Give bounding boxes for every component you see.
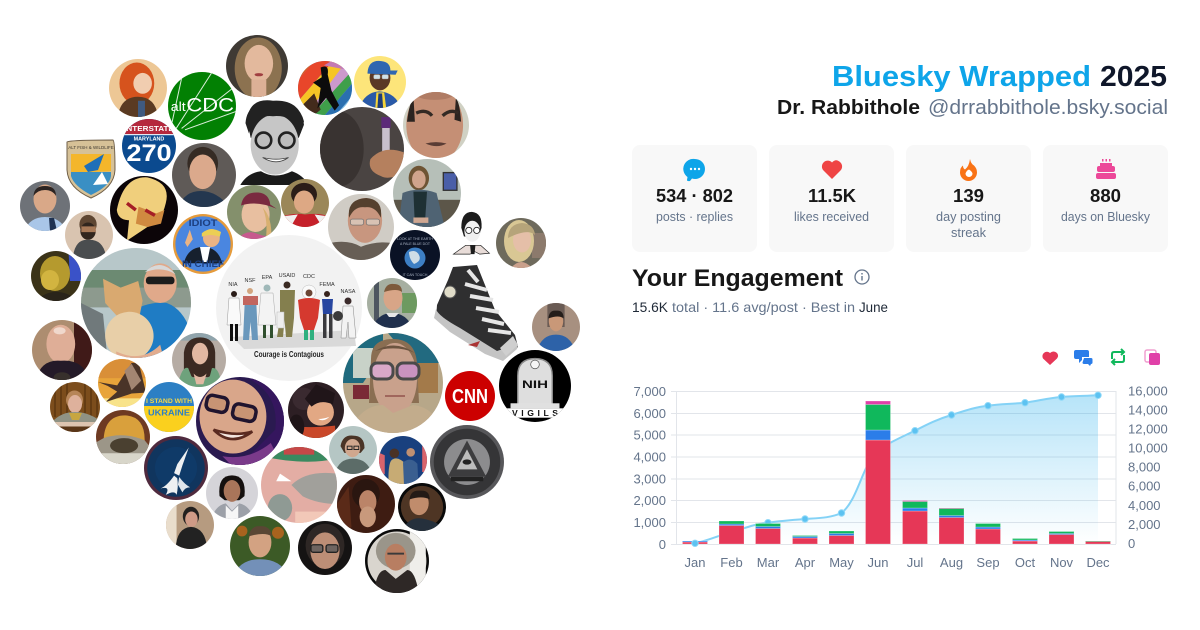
month labels: Aug bbox=[940, 555, 963, 570]
avatar: rainbow flag silhouette bbox=[298, 61, 352, 115]
avatar: bald older man bbox=[32, 320, 92, 383]
panel: days on Bluesky bbox=[1043, 145, 1168, 252]
left axis labels: 0 bbox=[659, 537, 666, 552]
figures in uniform bbox=[227, 282, 356, 341]
month labels: Jan bbox=[685, 555, 705, 570]
agency labels bbox=[228, 273, 356, 295]
avatar: Maryland interstate 270 sign: 270 bbox=[126, 140, 172, 167]
month labels: May bbox=[829, 555, 854, 570]
right axis labels: 4,000 bbox=[1128, 498, 1161, 513]
avatar: fish and wildlife shield: ALT FISH & WILDLIFE bbox=[68, 145, 114, 150]
icon: replies bubbles bbox=[1074, 350, 1092, 366]
icon: likes heart bbox=[1042, 352, 1058, 365]
avatar: man with curly hair and hand at mouth bbox=[337, 475, 395, 533]
right axis labels: 14,000 bbox=[1128, 402, 1168, 418]
avatar: woman with gray curly hair, black ring bbox=[365, 529, 429, 593]
chart legend bbox=[1042, 349, 1160, 366]
avatar: Maryland interstate 270 sign: MARYLAND bbox=[134, 137, 164, 143]
avatar: altCDC logo bbox=[168, 72, 236, 140]
avatar: CNN logo: CNN bbox=[452, 386, 488, 408]
left axis labels: 4,000 bbox=[633, 450, 666, 464]
avatar: I Stand With Ukraine badge: UKRAINE bbox=[148, 408, 190, 418]
cumulative area and line bbox=[695, 392, 1101, 544]
title: 2025 bbox=[1100, 61, 1167, 93]
avatar: altCDC logo: alt bbox=[171, 99, 186, 114]
agency labels: NSF bbox=[244, 278, 256, 284]
engagement summary: total · 11.6 avg/post · Best in bbox=[672, 299, 855, 315]
avatar: bearded man with glasses bbox=[65, 211, 113, 259]
avatar: woman with long hair bbox=[226, 35, 288, 99]
avatar: earth from space: IT CAN TOUCH bbox=[403, 273, 428, 277]
avatar: ink cartoon man with glasses bbox=[453, 212, 489, 254]
month labels bbox=[685, 555, 1110, 570]
avatar: man selfie with glasses bbox=[328, 194, 394, 260]
avatar: woman in Virginia Tech cap bbox=[227, 185, 281, 239]
icon: chat bubble bbox=[683, 159, 705, 181]
agency labels: NASA bbox=[341, 289, 356, 295]
agency labels: USAID bbox=[279, 273, 295, 279]
left axis labels: 2,000 bbox=[633, 493, 666, 508]
right axis labels: 8,000 bbox=[1128, 460, 1161, 474]
avatar: I Stand With Ukraine badge bbox=[144, 382, 194, 432]
agency labels: EPA bbox=[262, 275, 273, 281]
avatar: NIH Vigils gravestone: VIGILS bbox=[512, 408, 558, 418]
agency labels: CDC bbox=[303, 274, 315, 280]
avatar: Maryland interstate 270 sign: INTERSTATE bbox=[124, 124, 174, 133]
panel: days on Bluesky: days on Bluesky bbox=[1061, 209, 1150, 224]
avatar: judge at a wooden bench bbox=[50, 382, 100, 432]
right axis labels: 10,000 bbox=[1128, 440, 1168, 456]
month labels: Feb bbox=[720, 555, 743, 570]
month labels: Jul bbox=[907, 555, 923, 570]
avatar: illuminati pyramid coin bbox=[430, 425, 504, 499]
avatar: woman with glasses and short dark hair bbox=[329, 426, 377, 474]
panel: day posting streak: 139 bbox=[953, 186, 984, 206]
avatar: I Stand With Ukraine badge: I STAND WITH bbox=[146, 398, 192, 405]
avatar: black and white portrait bbox=[240, 100, 309, 185]
avatar: rocket mission patch bbox=[144, 436, 208, 500]
left axis labels bbox=[633, 384, 666, 552]
agency labels: FEMA bbox=[319, 282, 335, 288]
avatar: woman in gray blazer bbox=[393, 159, 461, 227]
panel: day posting streak: streak bbox=[951, 225, 986, 240]
avatar: man in blue shirt with dog bbox=[81, 248, 196, 360]
panel: posts and replies: posts · replies bbox=[656, 209, 733, 224]
panel: likes received: 11.5K bbox=[808, 186, 856, 206]
left axis labels: 6,000 bbox=[633, 406, 666, 421]
right axis labels bbox=[1128, 384, 1168, 551]
avatar cluster bbox=[20, 35, 580, 593]
left axis labels: 7,000 bbox=[633, 384, 666, 399]
left axis labels: 5,000 bbox=[633, 428, 666, 442]
avatar: man on gray background bbox=[172, 143, 236, 207]
icon: info bbox=[855, 270, 869, 284]
month labels: Jun bbox=[868, 555, 888, 570]
avatar: pterodactyl at sunset bbox=[98, 359, 146, 407]
gridlines bbox=[671, 391, 1116, 544]
avatar: man in dark sweater bbox=[367, 278, 417, 328]
avatar: woman with long brown hair and green top bbox=[172, 333, 226, 387]
header bbox=[777, 61, 1168, 119]
chart: monthly engagement bbox=[633, 384, 1168, 570]
avatar: idiot in chief badge bbox=[173, 214, 233, 274]
month labels: Nov bbox=[1050, 555, 1074, 570]
right axis labels: 12,000 bbox=[1128, 422, 1168, 436]
month labels: Oct bbox=[1015, 555, 1035, 570]
avatar: woman in black suit bbox=[166, 501, 214, 549]
avatar: blonde anime character bbox=[110, 176, 178, 244]
month labels: Dec bbox=[1086, 555, 1110, 570]
panel: day posting streak: day posting bbox=[936, 209, 1001, 224]
right axis labels: 2,000 bbox=[1128, 517, 1161, 532]
avatar: NIH Vigils gravestone bbox=[499, 350, 571, 422]
icon: cake bbox=[1096, 159, 1116, 179]
avatar: man in plaid shirt bbox=[532, 303, 580, 351]
panel: likes received: likes received bbox=[794, 209, 869, 224]
icon: heart bbox=[822, 160, 842, 179]
stat cards bbox=[632, 145, 1168, 252]
avatar: close-up of balding man bbox=[403, 92, 469, 158]
avatar: person with glasses and dark hair bbox=[298, 521, 352, 575]
avatar: earth from space: A PALE BLUE DOT bbox=[400, 242, 431, 246]
left axis labels: 1,000 bbox=[633, 515, 666, 530]
avatar: dark photo with hand holding vial bbox=[313, 107, 404, 191]
right axis labels: 6,000 bbox=[1128, 478, 1161, 494]
avatar: redhead cartoon bbox=[109, 59, 167, 117]
panel: day posting streak bbox=[906, 145, 1031, 252]
avatar: earth from space bbox=[390, 230, 440, 280]
avatar: idiot in chief badge: IN CHIEF bbox=[182, 259, 225, 269]
caption: Courage is Contagious bbox=[254, 349, 324, 359]
avatar: young man in red and white shirt bbox=[281, 179, 329, 227]
avatar: blonde woman bbox=[496, 218, 547, 268]
panel: posts and replies bbox=[632, 145, 757, 252]
heading: Your Engagement: Your Engagement bbox=[632, 265, 843, 292]
month labels: Mar bbox=[757, 555, 780, 570]
handle: @drrabbithole.bsky.social bbox=[928, 97, 1168, 119]
avatar: earth from space: LOOK AT THE EARTH bbox=[397, 237, 433, 241]
first data point bbox=[692, 540, 698, 546]
panel: days on Bluesky: 880 bbox=[1090, 186, 1121, 206]
avatar: man in blue shirt and tie bbox=[20, 181, 70, 231]
engagement summary: 15.6K bbox=[632, 299, 669, 315]
right axis labels: 0 bbox=[1128, 536, 1135, 551]
left axis labels: 3,000 bbox=[633, 472, 666, 486]
avatar: Maryland interstate 270 sign bbox=[122, 119, 176, 173]
display name: Dr. Rabbithole bbox=[777, 97, 920, 119]
avatar: NIH Vigils gravestone: NIH bbox=[522, 379, 548, 391]
avatar: politicians shaking hands before flags bbox=[379, 436, 427, 484]
avatar: gold statue face bbox=[31, 251, 81, 301]
avatar: altCDC logo: CDC bbox=[186, 95, 234, 116]
icon: reposts arrows bbox=[1112, 349, 1124, 365]
avatar: high-top sneaker bbox=[434, 265, 518, 361]
avatar: tattooed arm with gray cat bbox=[261, 447, 337, 523]
avatar: cartoon man in blue cap on yellow bbox=[354, 56, 406, 108]
engagement summary: June bbox=[859, 299, 888, 315]
icon: flame bbox=[960, 159, 977, 181]
agency labels: NIA bbox=[228, 282, 238, 288]
icon: quotes squares bbox=[1145, 350, 1160, 365]
panel: likes received bbox=[769, 145, 894, 252]
avatar: man in plaid shirt in a garden bbox=[230, 516, 290, 576]
avatar: fish and wildlife shield bbox=[67, 140, 115, 198]
engagement summary bbox=[632, 299, 888, 315]
month labels: Sep bbox=[976, 555, 1000, 570]
avatar: idiot in chief badge: IDIOT bbox=[189, 218, 218, 228]
avatar: smiling man with glasses in purple light bbox=[196, 377, 284, 474]
avatar: skull in astronaut helmet bbox=[96, 410, 150, 464]
stacked bars bbox=[682, 401, 1110, 544]
avatar: vintage illustration of curly-haired woman bbox=[288, 382, 344, 439]
avatar: woman selfie with mirrored sunglasses bbox=[343, 333, 443, 433]
avatar: CNN logo bbox=[445, 371, 495, 421]
month labels: Apr bbox=[795, 555, 816, 570]
avatar: Courage is Contagious illustration bbox=[216, 235, 362, 381]
title: Bluesky Wrapped bbox=[832, 61, 1091, 93]
avatar: woman with dark bob in gray blazer bbox=[206, 467, 258, 519]
right axis labels: 16,000 bbox=[1128, 384, 1168, 398]
avatar: man in dark jacket with black ring bbox=[398, 483, 446, 531]
panel: posts and replies: 534 · 802 bbox=[656, 186, 733, 206]
